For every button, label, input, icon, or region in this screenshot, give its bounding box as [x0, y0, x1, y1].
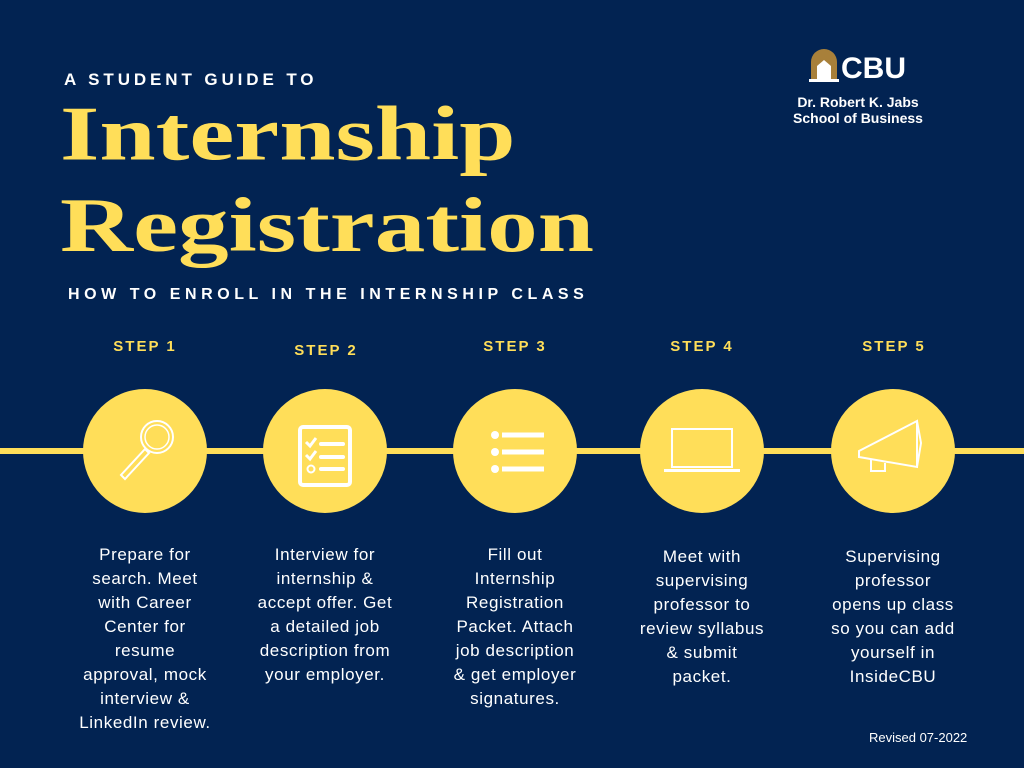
text: professor — [855, 571, 931, 590]
text: review syllabus — [640, 619, 764, 638]
text: Interview for — [275, 545, 375, 564]
logo — [793, 49, 923, 126]
text: your employer. — [265, 665, 385, 684]
text: STEP 3 — [483, 338, 547, 355]
step texts: interview & — [100, 689, 190, 708]
text: signatures. — [470, 689, 560, 708]
text: InsideCBU — [850, 667, 936, 686]
revised note: Revised 07-2022 — [869, 730, 967, 745]
text: & submit — [667, 643, 737, 662]
text: Internship — [475, 569, 555, 588]
text: job description — [456, 641, 574, 660]
text: & get employer — [454, 665, 576, 684]
text: opens up class — [832, 595, 954, 614]
title: Registration — [60, 183, 594, 269]
step labels: STEP 1 — [113, 338, 177, 355]
logo: School of Business — [793, 110, 923, 126]
text: Meet with — [663, 547, 741, 566]
step texts — [79, 545, 211, 732]
text: supervising — [656, 571, 748, 590]
step texts: Center for — [104, 617, 186, 636]
logo: Dr. Robert K. Jabs — [797, 94, 919, 110]
text: Registration — [466, 593, 564, 612]
icon: list — [453, 389, 577, 513]
text: a detailed job — [270, 617, 380, 636]
text: Packet. Attach — [456, 617, 574, 636]
text: professor to — [654, 595, 750, 614]
step texts: resume — [115, 641, 175, 660]
step texts: LinkedIn review. — [79, 713, 211, 732]
logo: CBU — [841, 52, 906, 85]
text: Supervising — [845, 547, 941, 566]
text: yourself in — [851, 643, 935, 662]
icon: laptop — [640, 389, 764, 513]
text: description from — [260, 641, 390, 660]
step texts: Prepare for — [99, 545, 191, 564]
step texts: search. Meet — [92, 569, 198, 588]
text: STEP 5 — [862, 338, 926, 355]
title: Internship — [60, 92, 516, 177]
icon: checklist — [263, 389, 387, 513]
text: Fill out — [488, 545, 542, 564]
timeline line — [0, 448, 1024, 454]
subheading: HOW TO ENROLL IN THE INTERNSHIP CLASS — [68, 286, 588, 303]
step texts: approval, mock — [83, 665, 207, 684]
step texts: with Career — [98, 593, 192, 612]
text: accept offer. Get — [258, 593, 392, 612]
text: so you can add — [831, 619, 955, 638]
text: STEP 4 — [670, 338, 734, 355]
text: STEP 2 — [294, 342, 358, 359]
subtitle top: A STUDENT GUIDE TO — [64, 70, 317, 89]
title — [60, 92, 594, 269]
icon: megaphone — [831, 389, 955, 513]
text: internship & — [276, 569, 373, 588]
text: packet. — [672, 667, 732, 686]
icon: magnifier — [83, 389, 207, 513]
